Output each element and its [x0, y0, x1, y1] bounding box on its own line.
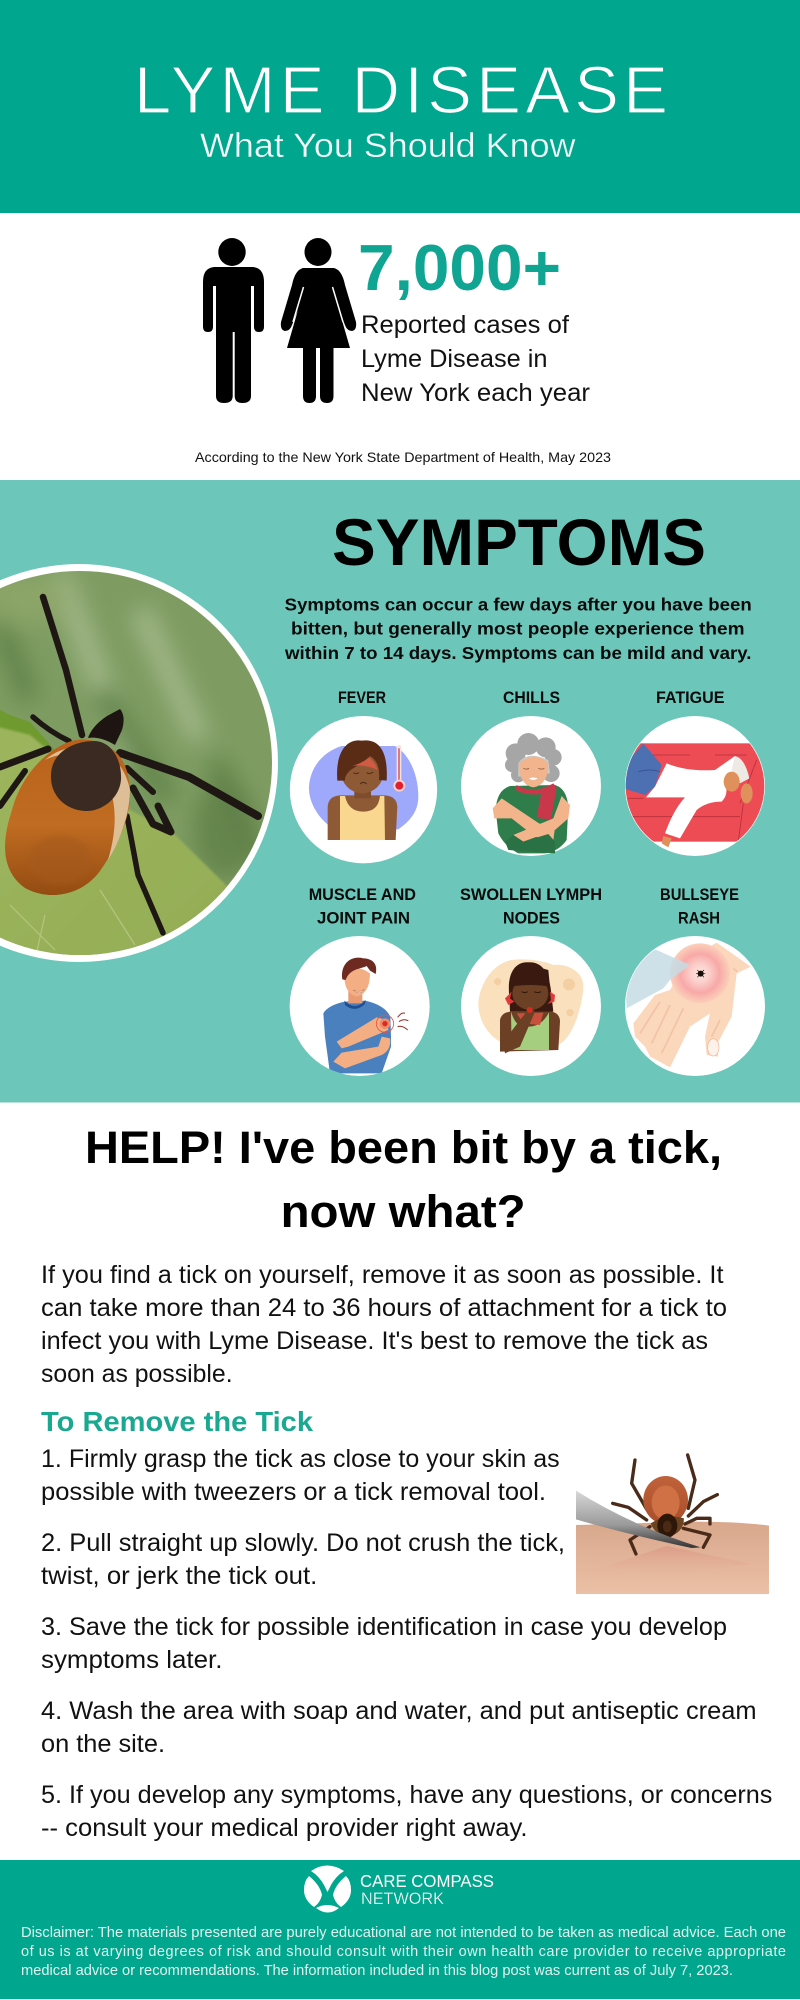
leaf	[0, 710, 54, 752]
heading	[85, 1122, 722, 1237]
statistic description: Reported cases of	[361, 311, 569, 339]
symptom: bullseye rash: BULLSEYE	[660, 886, 739, 904]
removal steps: 5. If you develop any symptoms, have any questions, or concerns	[41, 1781, 772, 1809]
disclaimer: of us is at varying degrees of risk and should consult with their own health care provider to receive appropriate	[21, 1944, 786, 1960]
symptom: bullseye rash	[623, 886, 765, 1076]
illustration: person on sofa	[620, 716, 770, 856]
panel: case statistic	[195, 231, 611, 465]
title: LYME DISEASE	[134, 53, 668, 128]
illustration: woman with fever	[290, 716, 437, 863]
illustration: tweezers removing tick	[576, 1455, 769, 1594]
removal steps: 3. Save the tick for possible identification in case you develop	[41, 1613, 727, 1641]
removal steps: on the site.	[41, 1730, 165, 1758]
intro text: Symptoms can occur a few days after you have been	[285, 594, 752, 614]
symptom: muscle and joint pain	[290, 886, 430, 1076]
disclaimer	[21, 1925, 786, 1979]
symptom: swollen lymph nodes: NODES	[503, 910, 560, 928]
statistic description: New York each year	[361, 379, 590, 407]
subtitle: What You Should Know	[200, 127, 576, 165]
removal steps: possible with tweezers or a tick removal tool.	[41, 1478, 546, 1506]
intro text: bitten, but generally most people experience them	[291, 618, 744, 638]
intro paragraph	[41, 1261, 727, 1388]
disclaimer: Disclaimer: The materials presented are purely educational are not intended to be taken as medical advice. Each one	[21, 1925, 786, 1941]
tick photo	[0, 560, 280, 990]
icon: woman figure	[281, 238, 356, 403]
icon: man figure	[203, 238, 264, 403]
intro text: within 7 to 14 days. Symptoms can be mild and vary.	[284, 643, 752, 663]
illustration: hand with rash and tick	[623, 936, 765, 1076]
symptom: muscle and joint pain: MUSCLE AND	[309, 886, 416, 904]
removal steps: 2. Pull straight up slowly. Do not crush the tick,	[41, 1529, 565, 1557]
symptom: fatigue: FATIGUE	[656, 689, 724, 707]
intro paragraph: can take more than 24 to 36 hours of attachment for a tick to	[41, 1294, 727, 1322]
removal steps: 4. Wash the area with soap and water, and put antiseptic cream	[41, 1697, 757, 1725]
statistic description	[361, 311, 590, 407]
statistic number: 7,000+	[358, 231, 561, 304]
symptom: swollen lymph nodes: SWOLLEN LYMPH	[460, 886, 602, 904]
removal steps: -- consult your medical provider right away.	[41, 1814, 528, 1842]
panel: what to do after a bite	[41, 1122, 772, 1842]
symptom: swollen lymph nodes	[460, 886, 602, 1076]
removal steps: twist, or jerk the tick out.	[41, 1562, 317, 1590]
heading: now what?	[281, 1186, 526, 1237]
symptom: fatigue	[620, 689, 770, 856]
removal steps: 1. Firmly grasp the tick as close to your skin as	[41, 1445, 560, 1473]
panel: header banner	[0, 0, 800, 213]
logo wordmark: CARE COMPASS	[360, 1871, 494, 1891]
symptom: bullseye rash: RASH	[678, 910, 720, 928]
heading: SYMPTOMS	[332, 505, 706, 579]
logo wordmark	[360, 1871, 494, 1908]
symptom: muscle and joint pain: JOINT PAIN	[317, 910, 410, 928]
intro paragraph: infect you with Lyme Disease. It's best to remove the tick as	[41, 1327, 708, 1355]
tick body	[5, 739, 130, 895]
logo wordmark: NETWORK	[361, 1889, 445, 1908]
symptom: chills: CHILLS	[503, 689, 560, 707]
panel: symptoms	[0, 480, 800, 1102]
intro paragraph: If you find a tick on yourself, remove it as soon as possible. It	[41, 1261, 724, 1289]
intro text	[284, 594, 752, 663]
source note: According to the New York State Department of Health, May 2023	[195, 449, 611, 465]
disclaimer: medical advice or recommendations. The information included in this blog post was current as of July 7, 2023.	[21, 1963, 733, 1979]
removal steps: symptoms later.	[41, 1646, 222, 1674]
symptom: fever: FEVER	[338, 689, 386, 707]
heading: HELP! I've been bit by a tick,	[85, 1122, 722, 1173]
statistic description: Lyme Disease in	[361, 345, 548, 373]
symptom: fever	[290, 689, 437, 863]
subheading: To Remove the Tick	[41, 1406, 313, 1437]
illustration: woman with sore neck	[461, 936, 601, 1076]
removal steps	[41, 1445, 772, 1842]
symptom: chills	[461, 689, 601, 856]
illustration: woman shivering	[461, 716, 601, 856]
intro paragraph: soon as possible.	[41, 1360, 233, 1388]
panel: footer	[0, 1860, 800, 1999]
tick legs	[0, 597, 258, 933]
illustration: man with arm pain	[290, 936, 430, 1076]
icon: Care Compass logo	[304, 1866, 351, 1912]
